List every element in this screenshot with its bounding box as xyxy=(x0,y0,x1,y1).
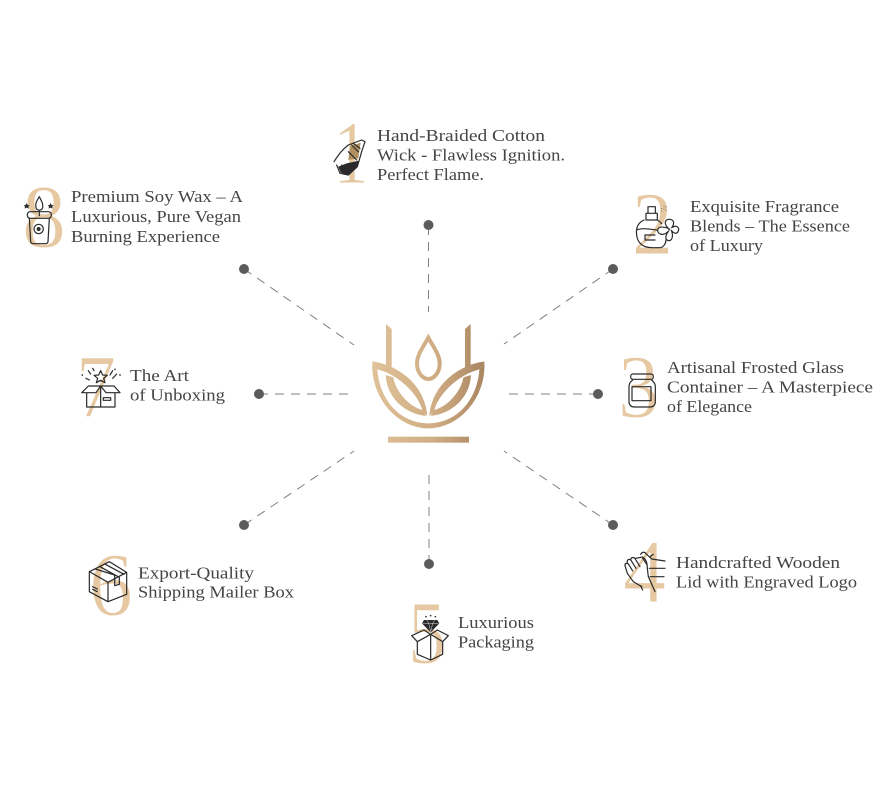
text: item 6: Export-Quality xyxy=(138,564,255,582)
item 4: wooden lid xyxy=(623,523,857,622)
text: item 6: Shipping Mailer Box xyxy=(138,582,295,602)
item 7: unboxing xyxy=(76,338,225,437)
text: item 1: Hand-Braided Cotton xyxy=(377,126,545,145)
text: item 2: Exquisite Fragrance xyxy=(690,197,839,216)
numeral 5: 5 xyxy=(408,584,446,683)
text: item 3: Container – A Masterpiece xyxy=(667,378,873,396)
text: item 8: Luxurious, Pure Vegan xyxy=(71,207,241,226)
item 2: fragrance xyxy=(632,175,850,274)
item 8: soy wax xyxy=(22,168,243,267)
text: item 2: Blends – The Essence xyxy=(690,216,850,236)
icon: candle xyxy=(24,197,54,244)
numeral 4: 4 xyxy=(623,523,666,622)
item 5: luxurious packaging xyxy=(408,584,534,683)
text: item 7: of Unboxing xyxy=(130,386,225,404)
text: item 8: Burning Experience xyxy=(71,227,220,246)
text: item 3: of Elegance xyxy=(667,397,752,416)
text: item 4: Handcrafted Wooden xyxy=(676,553,840,572)
numeral 1: 1 xyxy=(333,104,369,203)
icon: perfume bottle and flower xyxy=(636,206,679,248)
text: item 5: Packaging xyxy=(458,632,534,652)
text: item 5: Luxurious xyxy=(458,613,534,632)
text: item 2: of Luxury xyxy=(690,236,764,255)
numeral 2: 2 xyxy=(632,175,673,274)
text: item 7: The Art xyxy=(130,366,189,385)
text: item 4: Lid with Engraved Logo xyxy=(676,572,857,592)
numeral 6: 6 xyxy=(89,536,133,635)
icon: glass jar xyxy=(629,374,655,407)
icon: hand braiding wick xyxy=(334,140,365,175)
item 3: glass container xyxy=(618,338,873,437)
numeral 7: 7 xyxy=(76,338,116,437)
text: item 8: Premium Soy Wax – A xyxy=(71,187,243,206)
icon: open box with star xyxy=(81,368,121,407)
central logo xyxy=(372,324,484,443)
connector lines xyxy=(244,226,613,564)
text: item 3: Artisanal Frosted Glass xyxy=(667,358,844,377)
icon: handcrafting hands xyxy=(625,552,665,592)
item 1: cotton wick xyxy=(333,104,565,203)
icon: shipping mailer box xyxy=(89,562,127,602)
numeral 3: 3 xyxy=(618,338,659,437)
connector dots xyxy=(239,220,618,569)
numeral 8: 8 xyxy=(22,168,66,267)
text: item 1: Wick - Flawless Ignition. xyxy=(377,146,565,164)
icon: box with diamond xyxy=(412,615,448,660)
text: item 1: Perfect Flame. xyxy=(377,165,484,184)
item 6: shipping box xyxy=(89,536,295,635)
